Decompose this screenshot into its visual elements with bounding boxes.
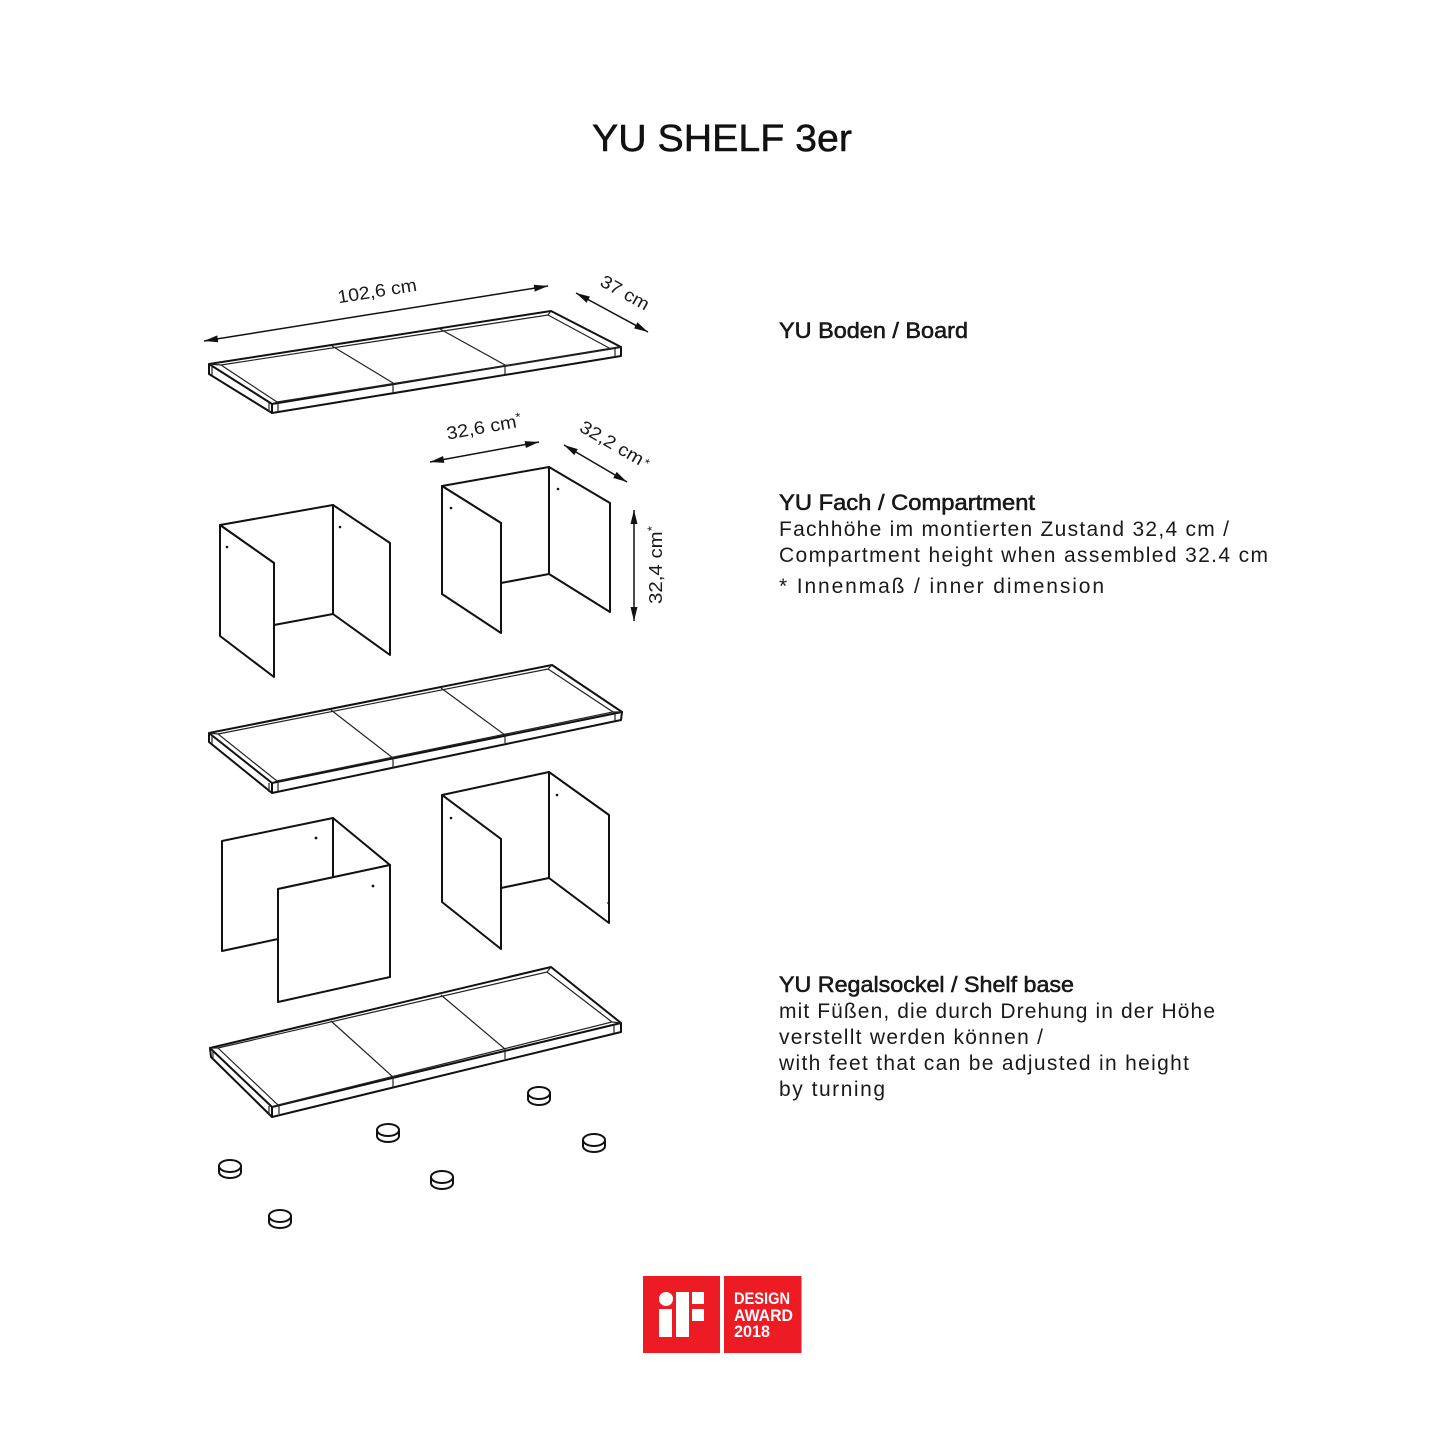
label: shelf base: verstellt werden können / bbox=[779, 1026, 1043, 1049]
dimension: board depth: 37 cm bbox=[597, 271, 653, 314]
label: shelf base bbox=[778, 972, 1215, 1101]
shelf base board bbox=[210, 967, 621, 1117]
label: compartment: Compartment height when assembled 32.4 cm bbox=[779, 544, 1268, 567]
label: compartment: Fachhöhe im montierten Zustand 32,4 cm / bbox=[779, 518, 1229, 541]
label: shelf base: YU Regalsockel / Shelf base bbox=[779, 972, 1074, 997]
shelf board: middle bbox=[209, 665, 622, 793]
award text panel: 2018 bbox=[734, 1322, 770, 1341]
title: YU SHELF 3er bbox=[592, 118, 852, 160]
award text panel bbox=[724, 1276, 802, 1353]
label: compartment: * Innenmaß / inner dimension bbox=[779, 575, 1104, 598]
foot 1 bbox=[528, 1087, 550, 1105]
dimension: compartment height bbox=[634, 510, 666, 621]
compartment: lower right bbox=[442, 772, 609, 949]
dimension: board depth bbox=[576, 271, 653, 332]
compartment: upper left bbox=[220, 505, 390, 677]
dimension: board width: 102,6 cm bbox=[336, 275, 418, 307]
dimension: compartment depth bbox=[564, 417, 654, 482]
dimension: compartment depth: * bbox=[641, 456, 653, 471]
adjustable feet bbox=[219, 1087, 605, 1228]
dimension: compartment width: * bbox=[514, 410, 522, 424]
foot 4 bbox=[219, 1160, 241, 1178]
label: shelf base: with feet that can be adjusted in height bbox=[778, 1052, 1189, 1075]
compartment: upper right bbox=[442, 467, 610, 633]
award text panel: DESIGN bbox=[734, 1289, 790, 1308]
dimension: compartment depth: 32,2 cm bbox=[576, 417, 642, 466]
label: board: YU Boden / Board bbox=[779, 318, 968, 343]
label: compartment bbox=[779, 490, 1268, 598]
compartment: lower left bbox=[222, 818, 390, 1002]
dimension: board width bbox=[204, 275, 548, 341]
foot 2 bbox=[377, 1124, 399, 1142]
foot 5 bbox=[431, 1171, 453, 1189]
foot 6 bbox=[269, 1210, 291, 1228]
award text panel: AWARD bbox=[734, 1306, 793, 1325]
dimension: compartment width: 32,6 cm bbox=[445, 413, 511, 444]
label: shelf base: by turning bbox=[779, 1078, 885, 1101]
dimension: compartment width bbox=[430, 410, 539, 462]
label: shelf base: mit Füßen, die durch Drehung in der Höhe bbox=[779, 1000, 1215, 1023]
dimension: compartment height: * bbox=[645, 526, 659, 531]
shelf board: top bbox=[209, 311, 621, 413]
label: compartment: YU Fach / Compartment bbox=[779, 490, 1035, 515]
dimension: compartment height: 32,4 cm bbox=[646, 540, 666, 604]
foot 3 bbox=[583, 1134, 605, 1152]
logo mark bbox=[643, 1276, 720, 1353]
iF design award logo bbox=[643, 1276, 802, 1353]
